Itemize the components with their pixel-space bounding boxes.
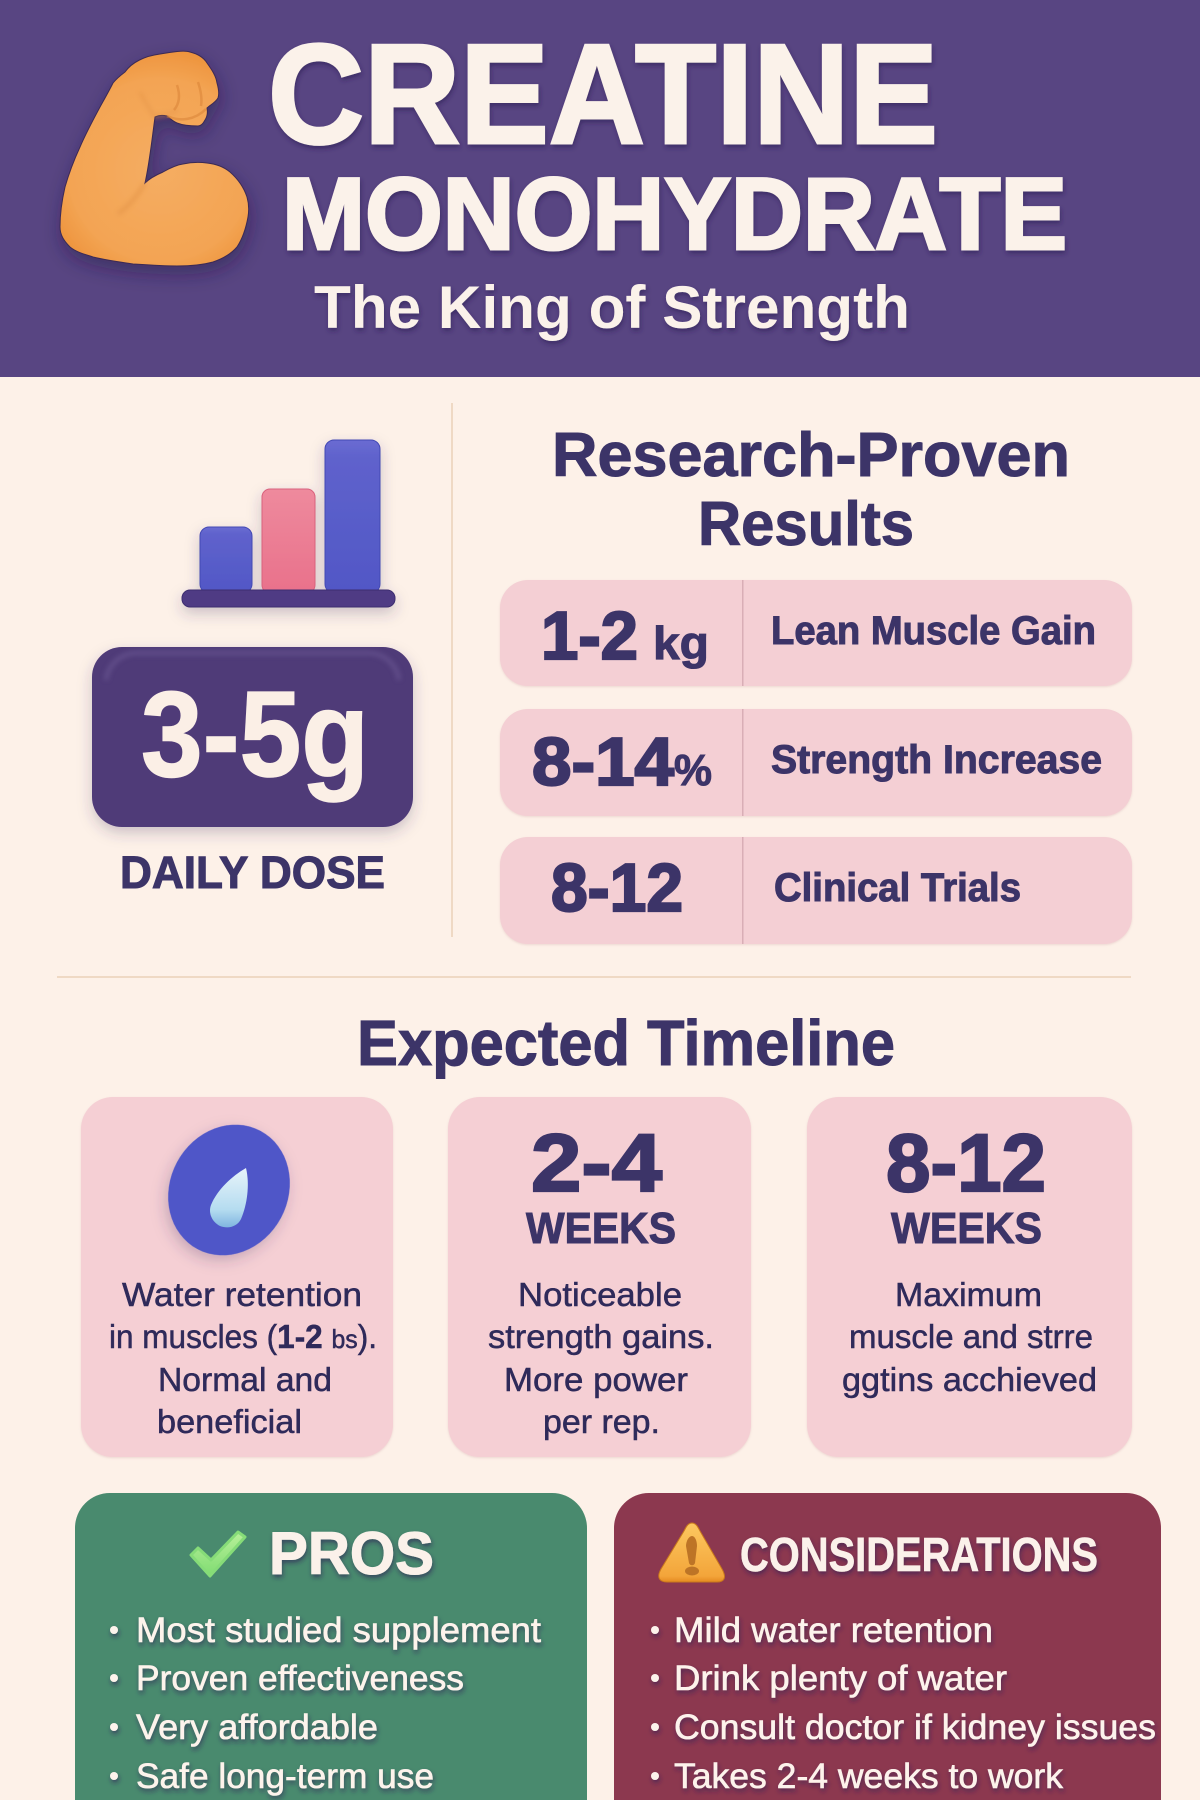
pros list: Safe long-term use xyxy=(136,1757,434,1796)
icon: check mark xyxy=(191,1532,245,1576)
panel: header xyxy=(0,0,1200,377)
result row: strength increase xyxy=(500,709,1132,816)
card unit: WEEKS xyxy=(526,1204,676,1253)
result row: clinical trials: 8-12 xyxy=(551,850,683,926)
result row: lean muscle gain: 1-2 xyxy=(541,598,638,674)
heading: research-proven results xyxy=(552,421,1070,559)
icon: bar chart xyxy=(182,440,395,607)
timeline card: 2-4 weeks xyxy=(448,1097,751,1457)
card text: muscle and strre xyxy=(849,1318,1093,1355)
considerations list: Drink plenty of water xyxy=(674,1659,1007,1698)
result row: strength increase: % xyxy=(674,746,712,795)
result row: strength increase: 8-14 xyxy=(532,724,674,800)
considerations list: Consult doctor if kidney issues xyxy=(674,1708,1156,1747)
card text: strength gains. xyxy=(488,1318,714,1355)
card unit: WEEKS xyxy=(891,1204,1042,1253)
pros list xyxy=(110,1611,541,1796)
icon: flexed arm xyxy=(60,51,249,266)
card text: ggtins acchieved xyxy=(842,1361,1097,1398)
pros list: Proven effectiveness xyxy=(136,1659,464,1698)
pros list: Most studied supplement xyxy=(136,1611,541,1650)
card number: 2-4 xyxy=(531,1118,662,1209)
dose badge: 3-5g xyxy=(141,666,369,802)
icon: water drop xyxy=(145,1103,313,1277)
dose badge xyxy=(92,647,413,827)
title: Creatine: CREATINE xyxy=(268,15,938,174)
pros list: Very affordable xyxy=(136,1708,378,1747)
divider: horizontal xyxy=(57,976,1131,978)
panel: considerations xyxy=(614,1493,1161,1800)
card number: 8-12 xyxy=(886,1118,1046,1209)
result row: lean muscle gain: Lean Muscle Gain xyxy=(771,609,1096,653)
result row: lean muscle gain xyxy=(500,580,1132,686)
heading: considerations: CONSIDERATIONS xyxy=(740,1529,1098,1582)
card text: Water retention xyxy=(122,1276,362,1313)
considerations list: Mild water retention xyxy=(674,1611,993,1650)
title: Monohydrate: MONOHYDRATE xyxy=(282,157,1067,271)
icon: warning triangle xyxy=(659,1523,724,1582)
card text: Maximum xyxy=(895,1276,1042,1313)
panel: pros xyxy=(75,1493,587,1800)
card text: Normal and xyxy=(158,1361,332,1398)
timeline card: water retention xyxy=(81,1097,393,1457)
considerations list: Takes 2-4 weeks to work xyxy=(674,1757,1063,1796)
card text: Noticeable xyxy=(518,1276,682,1313)
card text: per rep. xyxy=(543,1403,660,1440)
card text: in muscles (1-2 bs). xyxy=(109,1318,377,1355)
heading: research-proven results: Research-Proven xyxy=(552,421,1070,490)
card text xyxy=(109,1276,377,1440)
result row: lean muscle gain: kg xyxy=(653,617,709,669)
card text: beneficial xyxy=(157,1403,302,1440)
panel: research results xyxy=(500,421,1132,944)
result row: strength increase: Strength Increase xyxy=(771,738,1102,782)
panel: daily dose xyxy=(92,440,413,898)
card text: More power xyxy=(504,1361,688,1398)
result row: clinical trials: Clinical Trials xyxy=(774,866,1021,910)
divider: vertical xyxy=(451,403,453,937)
heading: pros: PROS xyxy=(269,1520,434,1587)
label: daily dose: DAILY DOSE xyxy=(120,847,385,898)
card text xyxy=(488,1276,714,1440)
heading: research-proven results: Results xyxy=(698,490,914,559)
card text xyxy=(842,1276,1097,1398)
subtitle: The King of Strength xyxy=(314,274,910,341)
result row: clinical trials xyxy=(500,837,1132,944)
timeline card: 8-12 weeks xyxy=(807,1097,1132,1457)
considerations list xyxy=(651,1611,1156,1796)
heading: expected timeline: Expected Timeline xyxy=(357,1007,895,1079)
